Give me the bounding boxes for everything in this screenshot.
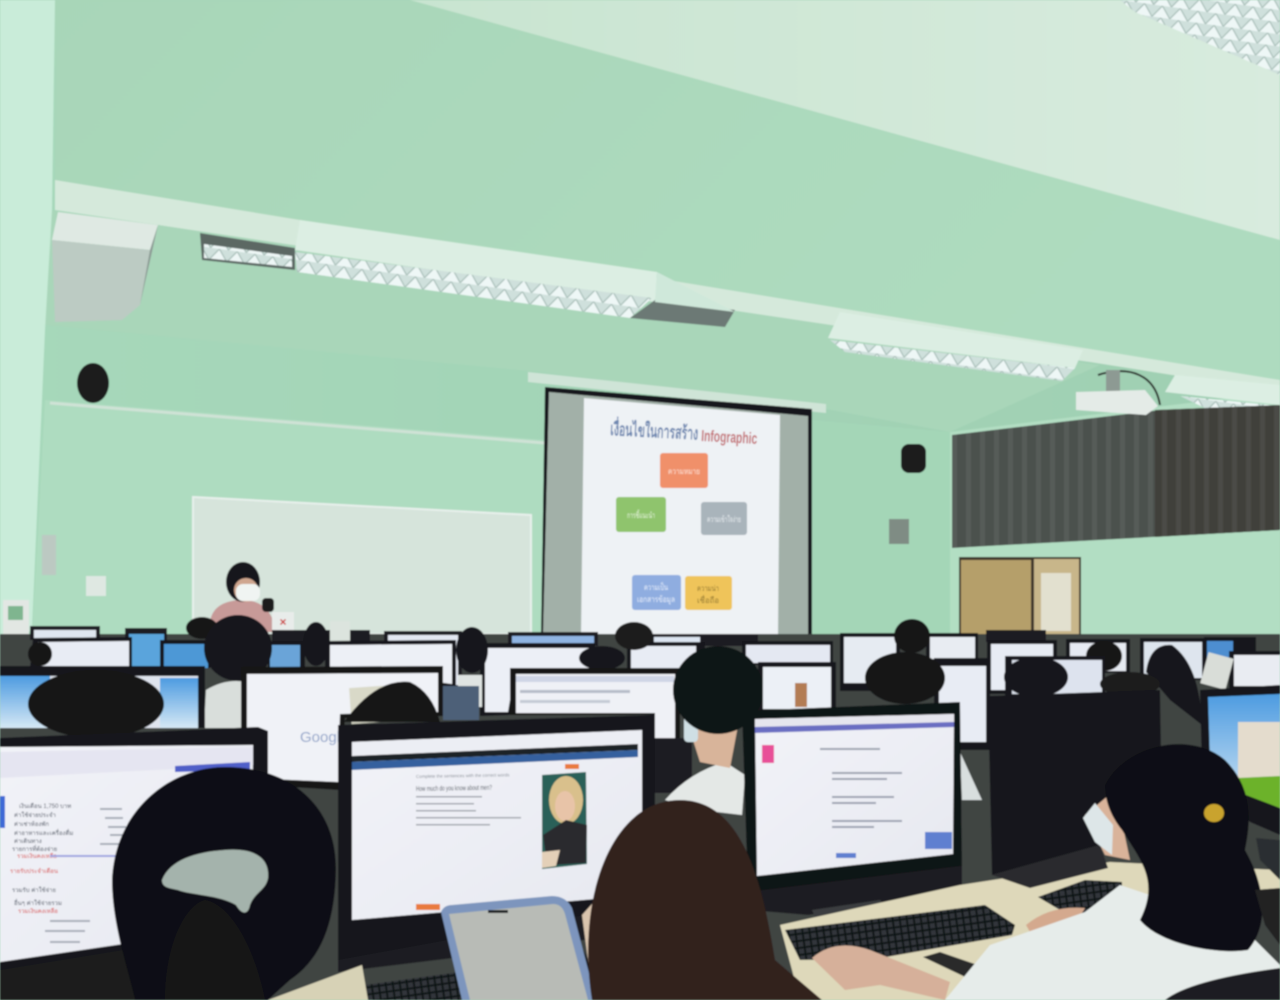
slide box: yellow: เชื่อถือ [697, 594, 719, 605]
desk strip bottom left [268, 965, 368, 1000]
tablet [441, 896, 596, 1000]
keyboards [365, 880, 1122, 1000]
projector screen [528, 372, 826, 636]
spreadsheet text lines: รายการที่ต้องจ่าย [12, 845, 57, 853]
spreadsheet text lines [12, 802, 73, 907]
third row centre monitor [241, 666, 479, 790]
front student: scrunchie ponytail [112, 767, 336, 1000]
front centre monitor with quiz [338, 715, 655, 972]
desk [780, 862, 1280, 1000]
front left monitor: รายรับประจำเดือน [10, 867, 58, 875]
arm and hand on keyboard [1026, 908, 1085, 932]
slide box: grey [701, 502, 747, 535]
dark monitor [988, 690, 1162, 888]
white shirt [945, 885, 1280, 1000]
third row screen [510, 668, 692, 793]
lower room base [0, 634, 1280, 1000]
presenter: × [279, 615, 287, 629]
spreadsheet text lines: ค่าใช้จ่ายประจำ [14, 811, 56, 819]
grey scrunchie [162, 850, 268, 912]
wall speakers [77, 363, 926, 473]
ceiling light top right [1120, 0, 1280, 75]
slide box: blue: เอกสารข้อมูล [637, 595, 675, 605]
dark curtain [952, 405, 1280, 548]
back row students [28, 615, 1256, 728]
front student: red-brown hair [582, 800, 822, 1000]
spreadsheet text lines: เงินเดือน 1,750 บาท [19, 802, 71, 810]
face and mask [1085, 790, 1130, 860]
phone on desk [923, 952, 998, 984]
slide box: blue [632, 575, 681, 610]
front left monitor: รวมเงินคงเหลือ [17, 852, 57, 860]
ceiling light centre [828, 312, 1083, 381]
spreadsheet text lines: ค่าเดินทาง [14, 838, 42, 845]
projector on ceiling mount [1076, 370, 1160, 415]
slide box: yellow: ความน่า [697, 584, 719, 593]
spreadsheet text lines: ค่าอาหารและเครื่องดื่ม [14, 829, 73, 837]
ceiling light right [1165, 375, 1280, 418]
slide title word: Infographic [701, 428, 758, 448]
quiz question: How much do you know about men? [416, 785, 492, 793]
second row of monitors [30, 633, 1280, 716]
slide box: green [616, 497, 666, 532]
air conditioner [52, 212, 158, 322]
front monitor with purple chat screen [742, 702, 962, 928]
whiteboard [3, 403, 909, 642]
spreadsheet text lines: รวมรับ ค่าใช้จ่าย [12, 886, 56, 894]
front left monitor: รวมเงินคงเหลือ [18, 907, 58, 915]
third row centre monitor: Google [300, 729, 348, 746]
presenter [210, 562, 294, 632]
third row right monitors [758, 656, 1105, 750]
spreadsheet text lines: อื่นๆ ค่าใช้จ่ายรวม [14, 899, 62, 907]
right building monitor [1200, 685, 1280, 835]
door [959, 557, 1081, 637]
slide title: เงื่อนไขในการสร้าง [610, 416, 699, 444]
slide box: grey: ความเข้าใจง่าย [707, 515, 741, 524]
spreadsheet text lines: ค่าเช่าห้องพัก [14, 821, 49, 828]
slide box: orange [660, 453, 708, 488]
photo of woman [542, 772, 587, 869]
right edge dark desk items [1255, 838, 1280, 945]
ceiling light left [200, 220, 735, 327]
slide box: orange: ความหมาย [668, 467, 700, 476]
chair [1165, 968, 1280, 1000]
back row of monitors [30, 621, 1046, 691]
third row left monitor [0, 666, 205, 738]
right student with ponytail [812, 744, 1280, 1000]
quiz heading: Complete the sentences with the correct words [416, 772, 510, 779]
male student with glasses and mask [665, 646, 763, 815]
front left monitor [0, 727, 268, 1000]
slide box: green: การชี้แนะนำ [627, 509, 655, 520]
slide box: blue: ความเป็น [644, 582, 668, 592]
mid row students right [865, 652, 1234, 800]
hair [1105, 744, 1262, 951]
slide box: yellow [685, 576, 732, 610]
